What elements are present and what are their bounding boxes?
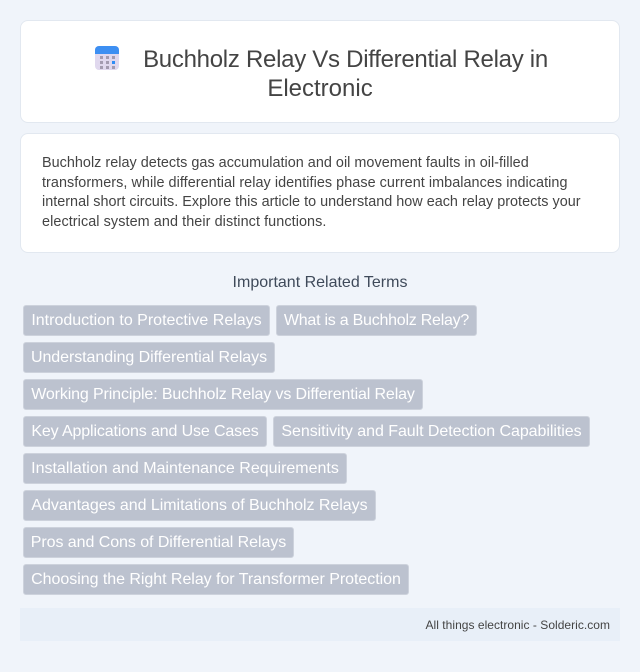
chip: what is: What is a Buchholz Relay? (284, 312, 469, 329)
chip: introduction: Introduction to Protective Relays (31, 312, 262, 329)
intro paragraph (42, 155, 581, 230)
section heading: Important Related Terms (233, 274, 407, 291)
title (143, 46, 548, 102)
intro paragraph: electrical system and their distinct functions. (42, 214, 326, 230)
intro paragraph: transformers, while differential relay identifies phase current imbalances indicating (42, 174, 568, 190)
icon: calendar (95, 46, 119, 70)
chip: choosing: Choosing the Right Relay for Transformer Protection (31, 571, 401, 588)
chip: working principle: Working Principle: Buchholz Relay vs Differential Relay (31, 386, 415, 403)
chip: advantages (23, 490, 376, 521)
intro paragraph: Buchholz relay detects gas accumulation and oil movement faults in oil-filled (42, 155, 529, 171)
chip: installation: Installation and Maintenance Requirements (31, 460, 339, 477)
chip: sensitivity: Sensitivity and Fault Detection Capabilities (281, 423, 582, 440)
chip: advantages: Advantages and Limitations of Buchholz Relays (31, 497, 368, 514)
chip: installation (23, 453, 347, 484)
chip: pros and cons (23, 527, 294, 558)
chip: introduction (23, 305, 270, 336)
title: Buchholz Relay Vs Differential Relay in (143, 46, 548, 73)
chip: what is (276, 305, 477, 336)
footer text: All things electronic - Solderic.com (426, 618, 610, 632)
intro paragraph: internal short circuits. Explore this article to understand how each relay protects your (42, 194, 581, 210)
chip: understanding: Understanding Differential Relays (31, 349, 267, 366)
chip: choosing (23, 564, 409, 595)
chip: working principle (23, 379, 423, 410)
chip: pros and cons: Pros and Cons of Differential Relays (31, 534, 286, 551)
title: Electronic (267, 75, 373, 102)
header card (20, 20, 620, 123)
chip: applications (23, 416, 267, 447)
intro text panel (20, 133, 620, 253)
chip: applications: Key Applications and Use Cases (31, 423, 259, 440)
chip: sensitivity (273, 416, 590, 447)
chip: understanding (23, 342, 275, 373)
footer (20, 608, 620, 641)
